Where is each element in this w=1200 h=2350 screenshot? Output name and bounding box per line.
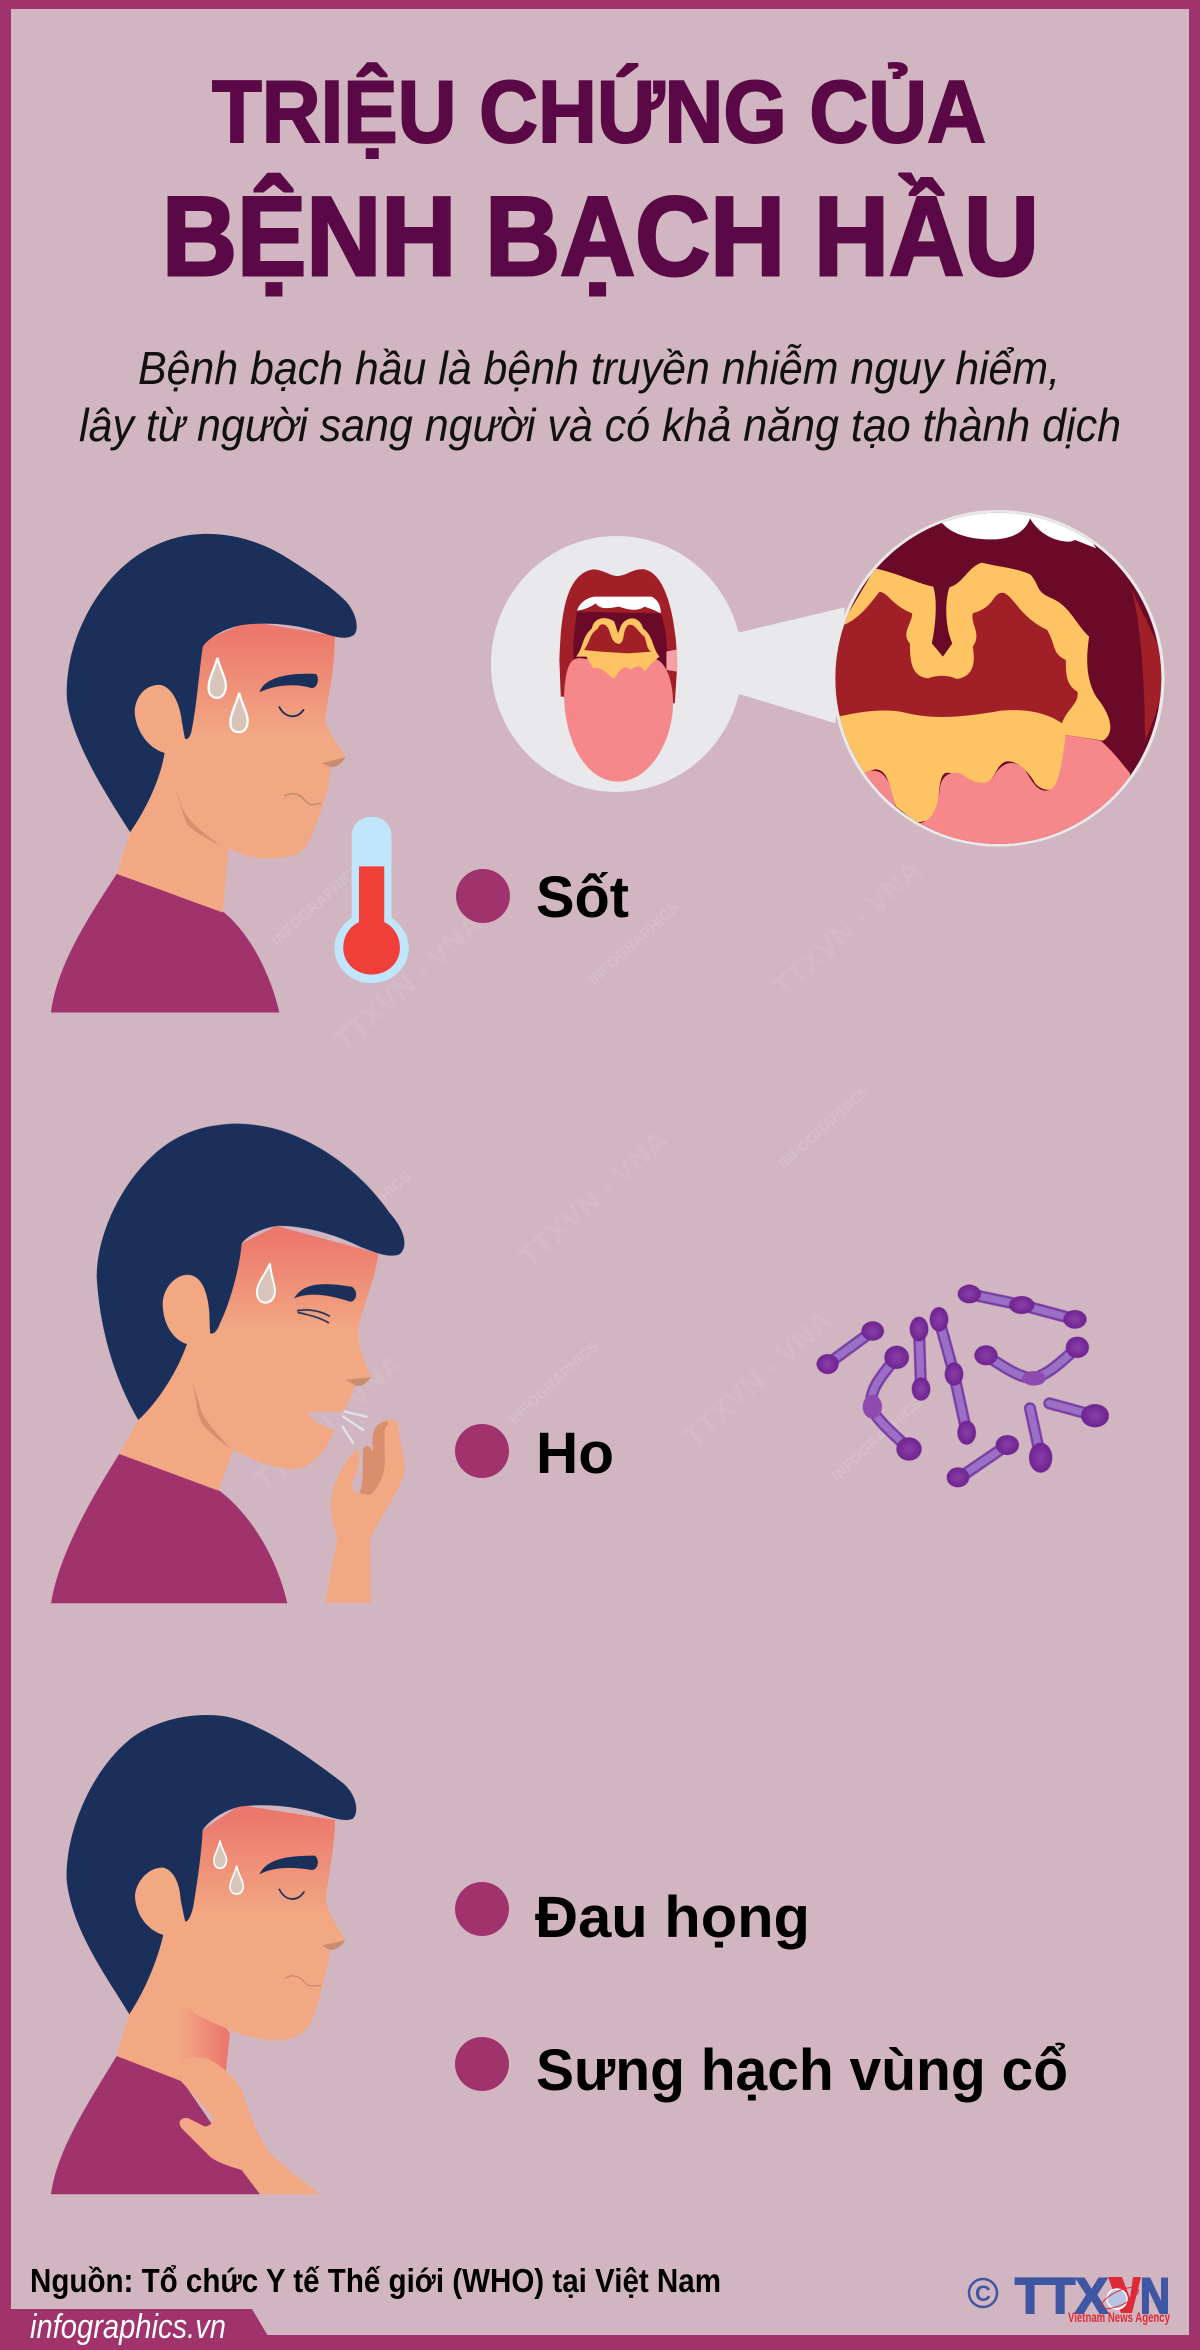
icon: thermometer	[334, 817, 409, 983]
shirt	[51, 1454, 287, 1603]
closed eye	[279, 1889, 304, 1899]
sweat drops	[214, 1841, 243, 1894]
jaw shadow	[192, 1379, 232, 1449]
hair	[97, 1124, 404, 1420]
jaw shadow	[174, 785, 221, 846]
subtitle	[79, 342, 1121, 451]
neck	[119, 1345, 233, 1491]
watermarks: TTXVN - VNA	[677, 1304, 839, 1454]
symptom: fever: Sốt	[536, 865, 629, 930]
hair	[67, 1715, 356, 2014]
title	[162, 62, 1039, 299]
ear	[163, 1275, 210, 1347]
bacteria cluster	[817, 1285, 1109, 1487]
watermarks: INFOGRAPHICS	[776, 1083, 872, 1172]
nose	[321, 757, 346, 767]
symptom: cough: Ho	[536, 1421, 614, 1486]
symptom: fever	[456, 865, 629, 930]
subtitle: lây từ người sang người và có khả năng tạo thành dịch	[79, 399, 1121, 451]
nose	[322, 1940, 345, 1950]
face	[161, 621, 346, 859]
open mouth	[559, 569, 677, 782]
watermarks: INFOGRAPHICS	[829, 1395, 925, 1484]
hair	[67, 534, 357, 832]
watermarks: INFOGRAPHICS	[586, 899, 682, 988]
shirt	[51, 2056, 260, 2194]
cough lines	[343, 1412, 367, 1443]
logo: TTXVN: C	[975, 2281, 991, 2306]
ear	[135, 1868, 185, 1935]
person with sore throat	[51, 1715, 356, 2194]
symptom: sore throat: Đau họng	[535, 1885, 810, 1950]
title: TRIỆU CHỨNG CỦA	[212, 62, 986, 161]
symptom: swollen neck glands: Sưng hạch vùng cổ	[536, 2038, 1068, 2103]
hand	[326, 1420, 405, 1603]
hand on neck	[179, 2056, 320, 2194]
enlarged throat	[835, 512, 1162, 844]
mouth	[285, 1976, 321, 1986]
eyebrow	[259, 674, 318, 692]
footer tab: infographics.vn: infographics.vn	[30, 2308, 226, 2346]
source: Nguồn: Tổ chức Y tế Thế giới (WHO) tại Việt Nam	[30, 2262, 721, 2299]
eyebrow	[294, 1284, 356, 1302]
title: BỆNH BẠCH HẦU	[162, 174, 1039, 299]
squinting eye	[298, 1310, 329, 1323]
magnifier circle and pointer	[731, 607, 845, 723]
face	[187, 1226, 378, 1469]
ear	[135, 685, 185, 754]
watermarks: TTXVN - VNA	[328, 908, 490, 1058]
mouth	[285, 794, 321, 805]
person coughing	[51, 1124, 405, 1603]
person with fever	[51, 534, 357, 1012]
logo: TTXVN: N	[1140, 2268, 1170, 2324]
closed eye	[279, 707, 303, 716]
face	[160, 1805, 345, 2040]
eyebrow	[259, 1856, 318, 1874]
watermarks: TTXVN - VNA	[767, 854, 929, 1004]
sweat drops	[209, 658, 248, 732]
logo: TTXVN	[969, 2268, 1170, 2325]
sweat drop	[257, 1263, 275, 1303]
watermarks: INFOGRAPHICS	[318, 1168, 414, 1257]
symptom: cough	[455, 1421, 614, 1486]
neck	[117, 750, 228, 912]
watermarks: INFOGRAPHICS	[506, 1338, 602, 1427]
watermarks: INFOGRAPHICS	[269, 860, 365, 949]
watermarks: TTXVN - VNA	[248, 1348, 410, 1498]
watermarks	[248, 854, 929, 1498]
throat illustration	[491, 503, 1168, 867]
neck	[117, 1935, 230, 2083]
shirt	[51, 874, 279, 1012]
logo: TTXVN: TTX	[1015, 2268, 1108, 2324]
subtitle: Bệnh bạch hầu là bệnh truyền nhiễm nguy hiểm,	[138, 342, 1060, 394]
nose	[346, 1377, 371, 1386]
watermarks: TTXVN - VNA	[513, 1124, 675, 1274]
